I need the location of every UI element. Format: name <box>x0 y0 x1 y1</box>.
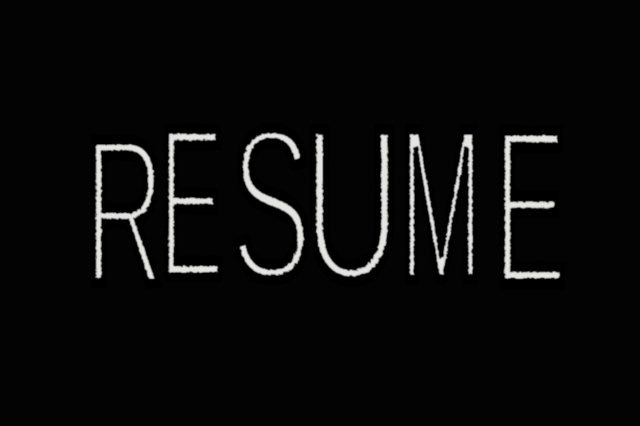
letter R: R <box>84 96 164 328</box>
letter M: M <box>400 81 483 326</box>
letter E: E <box>159 82 224 324</box>
letter E: E <box>493 83 567 332</box>
letter U: U <box>303 82 401 326</box>
letter S: S <box>231 83 312 324</box>
title: chalk word RESUME <box>84 81 567 332</box>
